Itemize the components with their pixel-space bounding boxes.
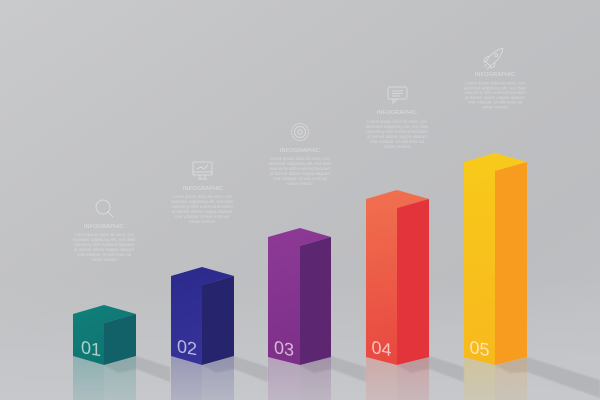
text 01: sectetuer adipiscing elit, sed diam — [73, 237, 136, 242]
block 04 — [366, 87, 429, 149]
number 01: 01 — [81, 337, 101, 360]
number 05: 05 — [470, 337, 490, 360]
text 03: minim veniam — [287, 181, 313, 186]
bar 05 — [464, 153, 527, 365]
text 03: erat volutpat. Ut wisi enim ad — [273, 176, 328, 181]
text 05: sectetuer adipiscing elit, sed diam — [464, 85, 527, 90]
icon: speech bubble — [388, 87, 407, 103]
text 05: erat volutpat. Ut wisi enim ad — [468, 100, 523, 105]
text 01: erat volutpat. Ut wisi enim ad — [77, 252, 132, 257]
block 05 — [464, 48, 527, 110]
icon: monitor — [193, 162, 212, 179]
bar 01 — [73, 305, 136, 365]
heading 05: INFOGRAPHIC — [475, 72, 515, 78]
text 01: ut laoreet dolore magna aliquam — [74, 247, 135, 252]
icon: magnifier — [96, 200, 113, 217]
text 04: nonummy nibh euismod tincidunt — [366, 129, 428, 134]
icon: gear — [292, 124, 308, 140]
bar 02 — [171, 267, 234, 365]
heading 03: INFOGRAPHIC — [280, 148, 320, 154]
number 04: 04 — [372, 337, 392, 360]
text 01: Lorem ipsum dolor sit amet, con — [74, 232, 134, 237]
number 03: 03 — [274, 337, 294, 360]
text 02: Lorem ipsum dolor sit amet, con — [172, 194, 232, 199]
bar 03 — [268, 228, 331, 365]
text 02: minim veniam — [189, 219, 215, 224]
text 01: nonummy nibh euismod tincidunt — [73, 242, 135, 247]
text 05: ut laoreet dolore magna aliquam — [465, 95, 526, 100]
text 03: nonummy nibh euismod tincidunt — [269, 166, 331, 171]
bar 04 — [366, 190, 429, 365]
text 03: Lorem ipsum dolor sit amet, con — [270, 156, 330, 161]
text 05: Lorem ipsum dolor sit amet, con — [465, 80, 525, 86]
heading 02: INFOGRAPHIC — [183, 186, 223, 192]
text 04: minim veniam — [384, 144, 410, 149]
text 03: ut laoreet dolore magna aliquam — [270, 171, 331, 176]
text 02: erat volutpat. Ut wisi enim ad — [175, 214, 230, 219]
text 04: ut laoreet dolore magna aliquam — [367, 134, 428, 139]
reflections — [73, 356, 527, 400]
heading 04: INFOGRAPHIC — [377, 110, 417, 116]
block 01 — [73, 200, 136, 262]
block 02 — [171, 162, 234, 224]
number 02: 02 — [177, 336, 197, 359]
text 05: nonummy nibh euismod tincidunt — [464, 90, 526, 95]
heading 01: INFOGRAPHIC — [84, 224, 124, 230]
text 01: minim veniam — [91, 257, 117, 262]
text 04: erat volutpat. Ut wisi enim ad — [370, 139, 425, 144]
text 02: nonummy nibh euismod tincidunt — [171, 204, 233, 209]
floor shadows — [104, 356, 600, 398]
text 04: sectetuer adipiscing elit, sed diam — [366, 124, 429, 129]
text 02: ut laoreet dolore magna aliquam — [172, 209, 233, 214]
text 03: sectetuer adipiscing elit, sed diam — [269, 161, 332, 166]
icon: rocket — [484, 48, 503, 69]
block 03 — [269, 124, 332, 186]
text 04: Lorem ipsum dolor sit amet, con — [367, 119, 427, 124]
text 02: sectetuer adipiscing elit, sed diam — [171, 199, 234, 204]
text 05: minim veniam — [482, 104, 508, 110]
